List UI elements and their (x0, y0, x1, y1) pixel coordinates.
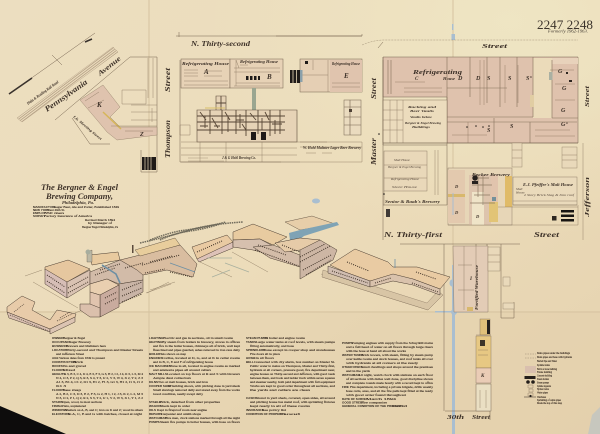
map legend: Sprinkling of oxide pipes (537, 398, 562, 402)
map legend: Water pipes (537, 390, 549, 394)
specifications text column 4: of all sections with duties well done, good discipline shown (346, 377, 433, 382)
specifications text column 2: and ammonia pipes all around cellars (153, 368, 212, 372)
street labels: Street (164, 67, 172, 92)
specifications text column 4: Pumping engines with supply from the Schuylkill mains (352, 341, 434, 345)
specifications text column 3: hydrants at all corners, pressure good, fire department near, (250, 368, 335, 373)
Bergner and Engel title: Brewing Company, (45, 191, 113, 201)
specifications text column 3: STEAM PUMPS (246, 336, 268, 340)
cream block: Bergner & Engel Brewing (404, 121, 441, 125)
map legend: Concrete building (537, 374, 552, 378)
specifications text column 3: and steamer nearby, both paid department with full equipment (250, 380, 335, 385)
plant block: refrigerating houses along N. Thirty-second Street: B (266, 73, 272, 81)
map legend: Hydrant valves (537, 387, 549, 391)
map legend: Sprinkler Apparatus (537, 384, 551, 388)
background trees (140, 222, 243, 243)
specifications text column 1: ROOFS (52, 364, 63, 368)
street labels (164, 40, 591, 421)
plant block: refrigerating houses along N. Thirty-second Street: Refrigerating House (332, 62, 360, 66)
specifications text column 2 (149, 336, 241, 425)
specifications text column 2: STABLE (149, 400, 161, 404)
diagonal block: Pennsylvania Avenue and railroad: Z (139, 132, 144, 138)
specifications text column 3: kept ready in all of these rooms (250, 404, 311, 408)
specifications text column 1: OWNER (52, 336, 64, 340)
specifications text column 1: and Jefferson Street (56, 352, 84, 356)
specifications text column 3: Large water tanks at roof levels, with steam pumps (256, 340, 336, 345)
specifications text column 2: Sheds kept in order (160, 404, 191, 408)
specifications text column 2: HEATING (149, 340, 163, 344)
large refrigerating house and stores: D (475, 76, 481, 82)
specifications text column 4: and in the yards (346, 369, 371, 373)
lower middle city block: Bergner & Engel Brewing (388, 165, 421, 169)
specifications text column 3: engine houses on Thirty-second and Jefferson, with good roads (250, 372, 336, 377)
boiler stacks (142, 157, 156, 170)
map legend: Main pipes and hose with hydrants (537, 355, 573, 359)
specifications text column 3: Public water in mains on Thompson, Master and Thirty-first, (250, 364, 335, 369)
specifications text column 4: GOOD STREET (342, 400, 364, 404)
street labels: Street (585, 86, 591, 107)
specifications text column 3: Connected with city alarm, box number on Master St. (254, 360, 335, 365)
street labels: Street (534, 230, 560, 239)
lower middle city block: Store House (392, 185, 418, 189)
specifications text column 1: CONSTRUCTION (52, 360, 76, 364)
isometric view of brewery (7, 216, 450, 334)
specifications text column 1: Lager Brewery (69, 340, 91, 344)
specifications text column 2: As shown on map (162, 352, 186, 356)
specifications text column 1: Open, wood, in most sections (62, 400, 103, 405)
large refrigerating house and stores: G (562, 86, 567, 92)
specifications text column 1 (52, 336, 144, 417)
specifications text column 2: In building shown, with pitching done in yard sheds (168, 384, 241, 389)
specifications text column 4: Brick towers, with steam, filling by steam pump (361, 353, 433, 358)
specifications text column 3: Works are kept in good order throughout all sections, and (250, 384, 335, 389)
specifications text column 1: Bergner & Engel (63, 336, 85, 340)
Bergner brewery complex and E.J. Pfeiffer's Malt House: D (454, 210, 459, 215)
specifications text column 1: A 3, B 3, C 4, D 4, E 3, F 3, G 3, H 2, I 2, J 4, K 3, L 3, M 4 (64, 372, 143, 377)
diagonal block: Pennsylvania Avenue and railroad: Phila & Reading Rail Road (26, 79, 60, 106)
specifications text column 2: and fire in the boiler houses, chimneys all of brick, well kept (153, 344, 240, 349)
street labels: Street (482, 43, 507, 50)
specifications text column 1: A 2, B 2, C 3, D 3, E 2, F 3, G 2, H 1, I 2, J 3, K 2, L 2, M 3 (56, 392, 143, 397)
specifications text column 1: OCCUPANCY (52, 340, 71, 344)
specifications text column 2: Small shavings removed daily and stored away from the works (153, 388, 241, 392)
street labels: Thompson (164, 120, 172, 158)
specifications text column 2: Kept in fireproof room near engine (157, 408, 208, 412)
specifications text column 4: DATE OF SURVEY (342, 397, 368, 401)
specifications text column 2: OILS (149, 408, 156, 412)
specifications text column 4 (342, 341, 434, 408)
map legend: Steam pumps (537, 380, 549, 384)
lower middle city block (362, 40, 583, 240)
specifications text column 1: FLOORS (52, 368, 64, 372)
specifications text column 2: Carpenter and smith shops (161, 412, 202, 416)
lower middle city block: Malt House (393, 158, 410, 162)
specifications text column 1: In A, C, E and G with hatches, closed at night (68, 412, 142, 417)
Bergner and Engel title: Philadelphia, Pa. (62, 200, 94, 205)
specifications text column 1: FINISH (52, 404, 62, 408)
cream block: Vaults below (410, 115, 433, 119)
large refrigerating house and stores: C (415, 77, 419, 82)
specifications text column 2: BOILERS (149, 352, 162, 356)
specifications text column 2: Steam fire pumps in boiler houses, with hose on floors (160, 420, 241, 425)
street labels: Jefferson (584, 176, 591, 219)
specifications text column 2: MALT MILLS (149, 372, 167, 376)
map legend: Brick or stone building (537, 367, 557, 371)
specifications text column 3: and pitching house has metal roof, with sprinkling fixtures (250, 400, 336, 405)
specifications text column 1: N 3, O 2, P 1, Q 2, R 2, S 3, T 2, U 1, V 2, W 3, X 1, Y 1, Z 2 (56, 396, 143, 401)
narrow block south of N. Thirty-first Street (400, 244, 520, 420)
specifications text column 4: with hydrants at all corners at the ready (346, 361, 418, 365)
cream block: Beer Vaults (409, 109, 435, 113)
map legend: Buried Pipe and Water (537, 359, 558, 363)
large refrigerating house and stores: G (561, 108, 566, 114)
Bergner and Engel title: Lager Beer, Ale and Porter, Established 1849 (54, 205, 119, 210)
street labels: 30th (445, 415, 465, 421)
specifications text column 2: Two at malt houses, brick and iron (158, 380, 208, 385)
Bergner and Engel title: West 49th St. (47, 208, 65, 212)
diagonal block: Pennsylvania Avenue and railroad: Avenue (95, 55, 123, 78)
specifications text column 4: with the hose at hand all about the works (346, 349, 407, 353)
large refrigerating house and stores: D (457, 76, 463, 82)
specifications text column 1: Brick (73, 360, 83, 364)
Bergner and Engel title: EMPLOY (33, 211, 46, 215)
specifications text column 3: CASKS (246, 396, 257, 400)
large refrigerating house and stores: Refrigerating (412, 70, 462, 76)
street labels: Street (472, 415, 490, 421)
specifications text column 4: OTHER RISKS (342, 365, 363, 369)
large refrigerating house and stores: S° (526, 75, 532, 82)
specifications text column 2: Three in all, located in engine rooms as marked (169, 364, 240, 369)
specifications text column 4: Good (392, 404, 408, 408)
map number: 2247 2248 (537, 18, 593, 32)
Bergner brewery complex and E.J. Pfeiffer's Malt House: House (515, 190, 525, 194)
specifications text column 3: INSURANCE (246, 408, 264, 412)
specifications text column 1: Mixed (63, 368, 75, 372)
Bergner and Engel title: The Bergner & Engel (41, 182, 119, 192)
specifications text column 2: Good condition, neatly swept daily (153, 392, 203, 397)
specifications text column 1: WINDOWS (52, 408, 67, 412)
Bergner and Engel title: Bergner Engel Philadelphia, Pa (82, 225, 118, 230)
specifications text column 1: LOCATION (52, 348, 67, 352)
large refrigerating house and stores (383, 57, 578, 145)
specifications text column 2: Corliss, located at D, G, and at K in cellar rooms (162, 356, 241, 361)
specifications text column 2: ENGINES (149, 356, 163, 360)
Bergner and Engel title: SURVEY (33, 214, 45, 218)
plant block: refrigerating houses along N. Thirty-second Street: Refrigerating House (240, 59, 278, 64)
plant block: refrigerating houses along N. Thirty-second Street: Refrigerating House (182, 61, 229, 66)
specifications text column 4: with good order found throughout (346, 393, 406, 397)
specifications text column 3: Stored in yard sheds, covered, open sides, all around (256, 396, 335, 401)
map legend: Frame building (537, 370, 552, 374)
map legend: Made the top of this map (537, 401, 562, 405)
cream block (383, 100, 447, 143)
specifications text column 3: the yards and cellars are clean (250, 388, 311, 392)
J & G Hohl Brewing Co. building cluster: J & G Hohl Brewing Co. (221, 155, 256, 160)
diagonal block: Pennsylvania Avenue and railroad: K (96, 101, 103, 109)
cream block: Racking and (408, 105, 436, 109)
specifications text column 3: Fire doors all in place (250, 352, 281, 356)
J & G Hohl Brewing Co. building cluster (180, 88, 327, 162)
specifications text column 3: between them, and hook and ladder truck within seven squares (250, 376, 336, 381)
specifications text column 2: WAGON (149, 404, 161, 408)
specifications text column 3: CONDITION OF PROPERTY (246, 412, 285, 416)
specifications text column 4: and a full head of water on all floors through large risers (346, 345, 434, 349)
specifications text column 2: Electric and gas in sections, oil in small rooms (163, 336, 234, 341)
specifications text column 1: HEIGHTS (52, 372, 65, 376)
specifications text column 2: KILNS (149, 380, 158, 384)
large refrigerating house and stores: S (510, 124, 514, 130)
specifications text column 1: FLOORS (52, 388, 64, 392)
specifications text column 1: Brewers and Maltsters here (66, 344, 107, 348)
specifications text column 2: flues lined and pipes guarded, ashes removed in iron cans daily (153, 348, 240, 353)
specifications text column 2: LIGHTING (149, 336, 164, 340)
map legend: Sprinkler mains (537, 363, 550, 367)
long hall and east sections (192, 216, 339, 279)
torn black corner (0, 406, 66, 434)
specifications text column 1: STAIRS (52, 400, 63, 404)
large refrigerating house and stores: S (487, 128, 491, 134)
specifications text column 4: Fire department, including a private brigade, drills weekly (350, 385, 433, 390)
specifications text column 1: K1 3 (56, 384, 67, 388)
specifications text column 4: GENERAL CONDITION OF THE PROPERTY (342, 404, 403, 408)
narrow block south of N. Thirty-first Street: Fortified Warehouse (474, 265, 479, 310)
Bergner brewery complex and E.J. Pfeiffer's Malt House: Becker Brewery (470, 173, 511, 177)
specifications text column 2: REPAIRS (149, 412, 162, 416)
plant block: refrigerating houses along N. Thirty-second Street: E (343, 72, 349, 80)
map legend: Steam boilers (537, 377, 549, 381)
specifications text column 2: Brick, detached from other properties (160, 400, 221, 405)
specifications text column 2: COOPER SHOP (149, 384, 171, 388)
pink building on diagonal block (80, 85, 157, 140)
specifications text column 3: In boiler and engine rooms (265, 336, 306, 340)
secondary buildings by Master Street (300, 100, 362, 162)
specifications text column 1: Tin and gravel (62, 364, 86, 368)
specifications text column 1: Various dates from 1849 to present (59, 356, 105, 360)
diagonal block: Pennsylvania Avenue and railroad: Lit. Meeting Street (71, 114, 104, 142)
Bergner brewery complex and E.J. Pfeiffer's Malt House (448, 168, 578, 225)
diagonal block: Pennsylvania Avenue and railroad (9, 33, 157, 172)
specifications text column 1: AGE (52, 356, 59, 360)
large refrigerating house and stores: S (487, 76, 491, 82)
specifications text column 3: filling automatically, and hose (250, 344, 295, 349)
specifications text column 4: FIRE (342, 385, 349, 389)
specifications text column 2: and in B, C, E and F of refrigerating house (153, 360, 214, 365)
map legend: Main pipes under the buildings (537, 351, 571, 355)
large refrigerating house and stores: G° (561, 121, 568, 128)
specifications text column 3: Good (280, 412, 301, 416)
large refrigerating house and stores: S (508, 76, 512, 82)
far east buildings (328, 249, 450, 295)
Bergner and Engel title: Revised March 1894 (85, 218, 115, 222)
large refrigerating house and stores: G (558, 69, 563, 75)
specifications text column 1: Shutters on A, B, and C; iron on K and Z; wood in others (65, 408, 144, 413)
specifications text column 3: SPRINKLERS (246, 348, 265, 352)
specifications text column 4: Small dwellings and shops around the premises (361, 365, 434, 369)
map number: Formerly 1962-1963. (547, 30, 588, 34)
specifications text column 3: BELL (246, 360, 254, 364)
street labels: Street (370, 77, 378, 99)
Bergner brewery complex and E.J. Pfeiffer's Malt House: D (475, 214, 480, 219)
specifications text column 2: PUMPS (149, 420, 160, 424)
lower middle city block: Senior & Raab's Brewery (385, 199, 441, 204)
specifications text column 4: March 1894 (366, 397, 397, 401)
specifications text column 1: See map (63, 388, 82, 392)
specifications text column 4: Fire companies (361, 400, 388, 404)
street labels: N. Thirty-second (190, 40, 251, 48)
specifications text column 4: over kettle rooms and stock houses, and roof tanks all over (346, 357, 434, 362)
narrow block south of N. Thirty-first Street: I (469, 277, 473, 282)
street labels: N. Thirty-first (383, 230, 443, 239)
specifications text column 1: N 4, O 3, P 2, Q 3, R 3, S 4, T 3, U 2, V 3, W 4, X 2, Y 2, Z 3 (56, 376, 143, 381)
specifications text column 1: Thirty-second and Thompson and Master Streets (66, 348, 144, 352)
narrow brewery strip: K (480, 374, 485, 379)
south building (7, 296, 76, 334)
specifications text column 2: Five men, clock stations marked through all the night (165, 416, 240, 421)
specifications text column 3: See policy list (262, 408, 286, 412)
cream block: Buildings (411, 125, 431, 129)
specifications text column 4: WATCHMAN (342, 373, 360, 377)
specifications text column 4: hose carts, axes, and all the fire pails kept filled at the ready (346, 389, 433, 394)
specifications text column 3: TANKS (246, 340, 256, 344)
map legend: Watchman (537, 395, 546, 399)
Bergner and Engel title: NEW YORK (33, 208, 50, 212)
Bergner and Engel title: by Manager of (88, 221, 113, 225)
specifications text column 3: None except in cooper shop and storehouses (263, 348, 336, 352)
specifications text column 4: All night, watch clock with stations on each floor (358, 373, 434, 378)
Bergner and Engel title: Factory Insurance of America (44, 214, 93, 218)
specifications text column 4: and complete rounds made hourly with a record kept in office (346, 381, 434, 385)
Bergner and Engel title: 350 men (44, 211, 65, 215)
street labels: Master (370, 138, 378, 166)
specifications text column 2: Ample dust collectors (153, 376, 192, 380)
specifications text column 3 (246, 336, 336, 416)
plant block: refrigerating houses along N. Thirty-second Street: A (203, 68, 209, 76)
diagonal block: Pennsylvania Avenue and railroad: Pennsylvania (43, 78, 89, 114)
ground lines (25, 252, 443, 313)
specifications text column 1: BUSINESS (52, 344, 67, 348)
lower middle city block: Refrigerating House (390, 177, 419, 181)
Bergner brewery complex and E.J. Pfeiffer's Malt House: 2 Story Brick Slag & Iron roof (524, 193, 575, 197)
map legend (524, 351, 573, 405)
Bergner brewery complex and E.J. Pfeiffer's Malt House: E.J. Pfeiffer's Malt House (522, 182, 573, 187)
specifications text column 2: Located on top floors at R and S with blowers (167, 372, 241, 376)
west wing and central blocks (45, 238, 197, 317)
Bergner and Engel title (33, 182, 119, 230)
narrow brewery strip (476, 319, 491, 411)
Bergner brewery complex and E.J. Pfeiffer's Malt House: D (454, 184, 459, 189)
specifications text column 4: WATER TANKS (342, 353, 364, 357)
plant block: refrigerating houses along N. Thirty-second Street (176, 32, 362, 162)
specifications text column 1: ELEVATORS (52, 412, 70, 416)
Bergner and Engel title: MANUFACTURE. (33, 205, 57, 209)
specifications text column 2: WATCHMAN (149, 416, 167, 420)
specifications text column 4: PUMPS (342, 341, 353, 345)
specifications text column 2: By steam from boilers in brewery, stoves in offices (162, 340, 241, 345)
Bergner brewery complex and E.J. Pfeiffer's Malt House: Malt (515, 187, 523, 191)
secondary buildings by Master Street: W. Hohl Maltster Lager Beer Brewery (303, 146, 361, 150)
specifications text column 3: On all floors (254, 356, 275, 360)
specifications text column 2: ICE MACHINES (149, 364, 171, 368)
large refrigerating house and stores: House (442, 76, 455, 81)
specifications text column 3: HOSE (246, 356, 255, 360)
specifications text column 1: Plain, unplastered (62, 404, 86, 409)
blue repair strips along folds (299, 24, 600, 434)
specifications text column 1: A1 3, B1 4, C1 2, D1 3, E1 2, F1 3, G1 3, H1 2, I1 3, J1 2 (56, 380, 143, 385)
